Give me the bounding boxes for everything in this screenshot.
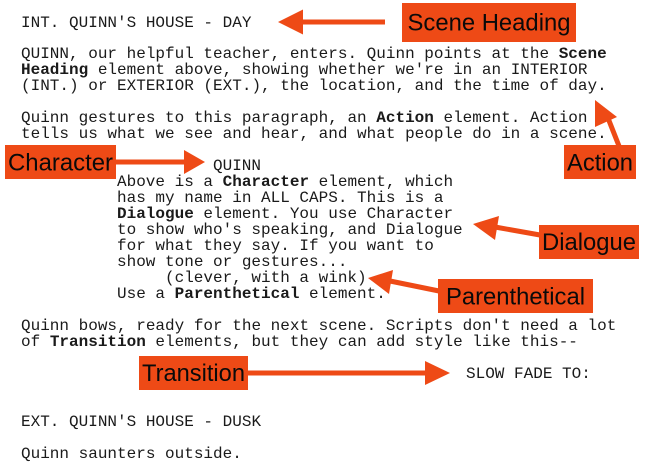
label: scene heading — [402, 3, 576, 42]
label: parenthetical: Parenthetical — [446, 284, 585, 310]
label: action: Action — [567, 150, 633, 176]
second scene heading: EXT. QUINN'S HOUSE - DUSK — [21, 413, 261, 431]
arrow: dialogue — [473, 216, 540, 240]
label: scene heading: Scene Heading — [408, 10, 570, 36]
closing action line: Quinn saunters outside. — [21, 445, 242, 463]
dialogue block: has my name in ALL CAPS. This is a — [117, 189, 444, 207]
label: transition: Transition — [142, 360, 245, 387]
action paragraph: action explanation: tells us what we see and hear, and what people do in a scene. — [21, 125, 607, 143]
action paragraph: scene heading explanation — [21, 45, 607, 95]
dialogue block: for what they say. If you want to — [117, 237, 434, 255]
arrow: scene heading — [278, 10, 385, 34]
dialogue block: to show who's speaking, and Dialogue — [117, 221, 463, 239]
dialogue block — [117, 173, 463, 271]
scene heading text: INT. QUINN'S HOUSE - DAY — [21, 14, 252, 32]
parenthetical line: (clever, with a wink) — [165, 269, 367, 287]
dialogue block: show tone or gestures... — [117, 253, 347, 271]
dialogue block: Above is a Character element, which — [117, 173, 453, 191]
transition text: SLOW FADE TO: — [466, 365, 591, 383]
label: dialogue: Dialogue — [542, 229, 636, 256]
action paragraph: scene heading explanation: Heading element above, showing whether we're in an INTERIOR — [21, 61, 588, 79]
action paragraph: action explanation — [21, 109, 607, 143]
character name: QUINN — [213, 157, 261, 175]
action paragraph: scene heading explanation: QUINN, our helpful teacher, enters. Quinn points at the Scene — [21, 45, 607, 63]
arrow: transition — [248, 361, 450, 385]
dialogue closing line: Use a Parenthetical element. — [117, 285, 386, 303]
label: character: Character — [8, 150, 113, 176]
dialogue block: Dialogue element. You use Character — [117, 205, 453, 223]
arrow: character — [116, 150, 205, 174]
action paragraph: transition explanation: Quinn bows, ready for the next scene. Scripts don't need a lot — [21, 317, 616, 335]
action paragraph: transition explanation: of Transition elements, but they can add style like this-- — [21, 333, 578, 351]
arrow: parenthetical — [368, 270, 439, 294]
action paragraph: transition explanation — [21, 317, 616, 351]
action paragraph: scene heading explanation: (INT.) or EXTERIOR (EXT.), the location, and the time of day. — [21, 77, 607, 95]
arrow: action — [595, 100, 619, 146]
action paragraph: action explanation: Quinn gestures to this paragraph, an Action element. Action — [21, 109, 588, 127]
